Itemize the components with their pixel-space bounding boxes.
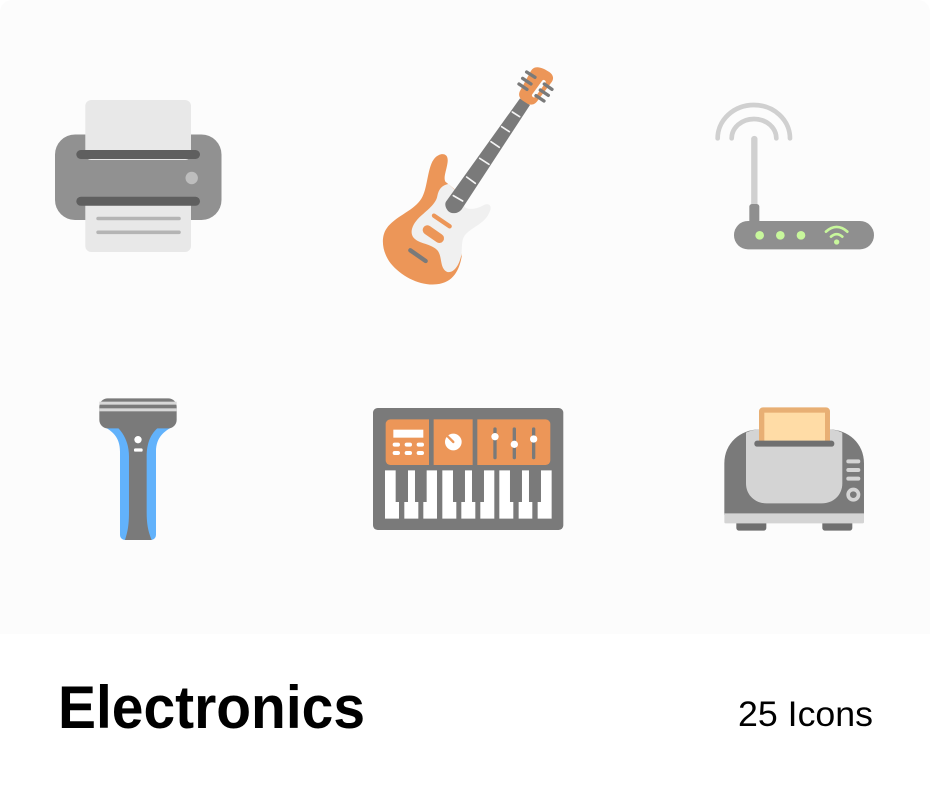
icon: printer	[55, 100, 222, 252]
icon: wifi router	[718, 105, 874, 249]
icon: synthesizer keyboard	[373, 408, 563, 530]
synth control panels	[386, 419, 550, 465]
icon count label: 25 Icons	[738, 695, 873, 734]
piano keys	[385, 470, 552, 519]
icon: electric shaver	[99, 398, 177, 540]
icon: toaster	[724, 407, 864, 531]
icon: electric guitar	[383, 67, 553, 285]
title: Electronics	[58, 674, 365, 741]
